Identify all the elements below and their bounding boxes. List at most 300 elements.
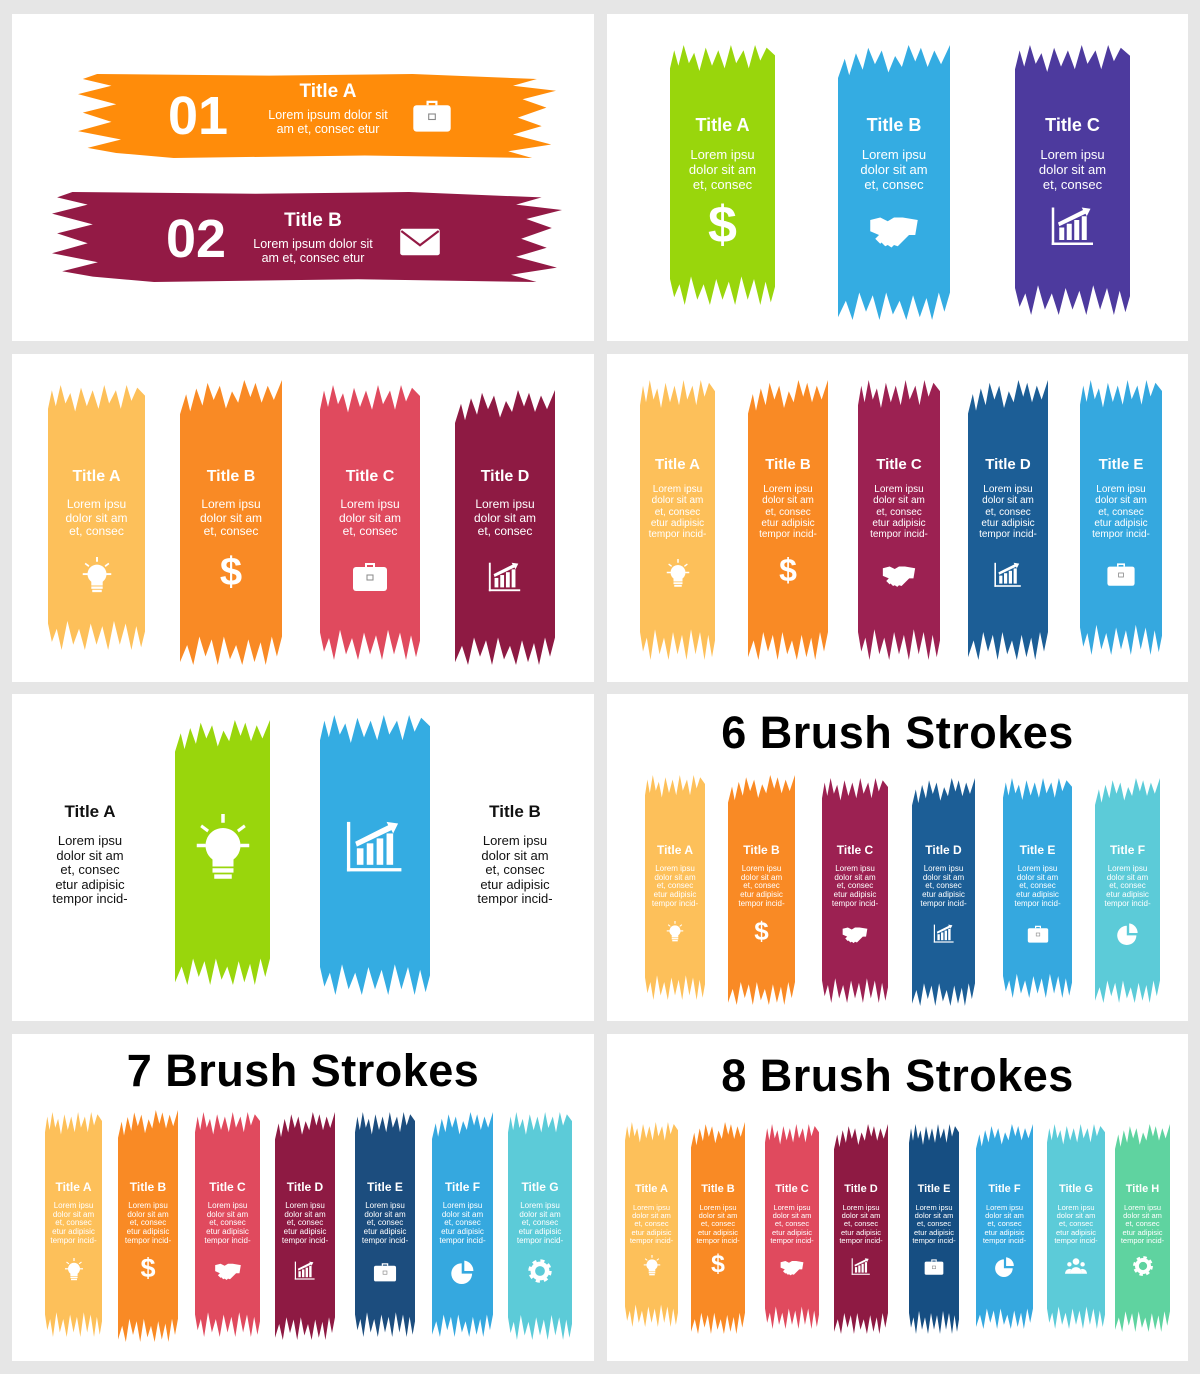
text: dolor sit am xyxy=(741,873,782,882)
text: et, consec xyxy=(634,1219,669,1228)
text: dolor sit am xyxy=(1039,162,1106,177)
text: etur adipisic xyxy=(981,518,1035,529)
icon: chart xyxy=(1052,208,1093,245)
title: Title F xyxy=(1110,843,1145,857)
text: Lorem ipsu xyxy=(842,1203,880,1212)
title: Title E xyxy=(1099,456,1143,473)
text: et, consec xyxy=(130,1218,166,1227)
brush 6-D xyxy=(912,778,975,1006)
text: tempor incid- xyxy=(630,1236,673,1245)
brush 8-G xyxy=(1047,1124,1105,1329)
text xyxy=(204,1202,250,1244)
text: dolor sit am xyxy=(200,510,262,524)
text: Lorem ipsu xyxy=(773,1203,811,1212)
brush: 4-B xyxy=(180,380,282,665)
text: dolor sit am xyxy=(689,162,756,177)
text: tempor incid- xyxy=(1014,899,1061,908)
brush: 5-C xyxy=(858,380,940,660)
text: et, consec xyxy=(444,1218,481,1227)
brush 8-C xyxy=(765,1124,819,1329)
text: et, consec xyxy=(876,507,922,518)
heading: 7 Brush Strokes: 7 Brush Strokes xyxy=(127,1045,479,1096)
text: Lorem ipsu xyxy=(1018,864,1057,873)
title: Title B xyxy=(743,843,780,857)
panel: 8 brush strokes xyxy=(607,1034,1188,1361)
title: Title A xyxy=(695,115,750,135)
text: Lorem ipsu xyxy=(201,497,261,511)
icon: briefcase xyxy=(353,563,387,591)
text: dolor sit am xyxy=(519,1210,561,1219)
title: Title A xyxy=(657,843,693,857)
text xyxy=(50,1202,96,1244)
icon: bulb xyxy=(196,814,250,879)
title: Title A xyxy=(635,1183,668,1195)
text xyxy=(1014,865,1060,908)
text: etur adipisic xyxy=(914,1228,954,1237)
text xyxy=(738,865,784,908)
text xyxy=(1092,484,1150,539)
text: tempor incid- xyxy=(912,1236,956,1245)
title: Title G xyxy=(1059,1183,1093,1195)
icon xyxy=(1132,1255,1154,1277)
text: etur adipisic xyxy=(441,1227,484,1236)
text: et, consec xyxy=(367,1218,403,1227)
panel: four strokes xyxy=(12,354,594,682)
icon xyxy=(528,1259,552,1283)
text xyxy=(1115,1204,1170,1245)
icon: envelope xyxy=(400,228,440,256)
text: tempor incid- xyxy=(1104,899,1151,908)
brush 8-A xyxy=(625,1122,678,1327)
text xyxy=(66,500,127,536)
text block: Title B xyxy=(477,802,553,906)
brush 7-B xyxy=(118,1110,178,1342)
brush 7-D xyxy=(275,1112,335,1340)
icon: $ xyxy=(754,916,769,946)
text: etur adipisic xyxy=(841,1228,881,1237)
text: et, consec xyxy=(985,507,1031,518)
text: et, consec xyxy=(743,881,780,890)
panel: 6 brush strokes xyxy=(607,694,1188,1021)
text: Lorem ipsu xyxy=(874,484,924,495)
brush: 5-A xyxy=(640,380,715,660)
brush: 01 orange xyxy=(78,74,556,158)
text: Lorem ipsu xyxy=(520,1201,560,1210)
text: et, consec xyxy=(1098,507,1144,518)
text: et, consec xyxy=(1125,1219,1160,1228)
text xyxy=(474,500,536,536)
text block: Title A: dolor sit am xyxy=(56,848,124,863)
text: tempor incid- xyxy=(839,1236,883,1245)
text: tempor incid- xyxy=(652,899,698,908)
icon: handshake xyxy=(882,566,916,587)
icon: briefcase xyxy=(413,100,451,132)
text xyxy=(648,484,706,539)
number 01: 01 xyxy=(168,86,228,146)
text block: Title B: et, consec xyxy=(485,862,545,877)
brush: 5-B xyxy=(748,380,828,660)
text: etur adipisic xyxy=(52,1227,95,1236)
text xyxy=(200,500,262,536)
text: tempor incid- xyxy=(759,529,817,540)
text xyxy=(362,1202,408,1244)
text: dolor sit am xyxy=(364,1210,406,1219)
text xyxy=(696,1204,740,1244)
brush: 4-C xyxy=(320,385,420,660)
icon xyxy=(994,1255,1016,1277)
text: Lorem ipsu xyxy=(655,864,695,873)
brush 6-C xyxy=(822,778,888,1003)
text: tempor incid- xyxy=(1121,1236,1164,1245)
text: tempor incid- xyxy=(282,1236,328,1245)
text block: Title B: Title B xyxy=(489,802,541,821)
brush: 4-A xyxy=(48,385,145,650)
text: tempor incid- xyxy=(696,1236,740,1245)
text: etur adipisic xyxy=(364,1227,406,1236)
title: Title A xyxy=(72,468,120,485)
text block: Title B: tempor incid- xyxy=(477,891,553,906)
text: tempor incid- xyxy=(920,899,967,908)
text xyxy=(689,150,756,191)
title: Title C xyxy=(837,843,873,857)
brush 7-A xyxy=(45,1112,102,1337)
text: dolor sit am xyxy=(654,873,696,882)
text: dolor sit am xyxy=(1095,495,1147,506)
text: tempor incid- xyxy=(770,1236,814,1245)
text: Lorem ipsu xyxy=(1040,147,1105,162)
text: tempor incid- xyxy=(204,1236,251,1245)
text: dolor sit am xyxy=(1017,873,1058,882)
text: dolor sit am xyxy=(652,495,703,506)
icon xyxy=(842,928,868,944)
title: Title A xyxy=(55,1180,92,1194)
brush 8-F xyxy=(976,1124,1033,1329)
brush: 3-B blue xyxy=(838,45,950,320)
title: Title F xyxy=(445,1180,480,1194)
text: dolor sit am xyxy=(762,495,814,506)
icon: chart xyxy=(488,562,520,592)
text: dolor sit am xyxy=(923,873,964,882)
text xyxy=(1047,1204,1105,1245)
text: tempor incid- xyxy=(517,1236,563,1245)
brush: 5-E xyxy=(1080,380,1162,655)
text block: Title A xyxy=(52,802,128,906)
text: etur adipisic xyxy=(654,890,696,899)
text: etur adipisic xyxy=(740,890,783,899)
icon xyxy=(374,1263,396,1282)
text xyxy=(765,1204,819,1245)
text: et, consec xyxy=(69,524,124,538)
text: etur adipisic xyxy=(872,518,926,529)
text: Lorem ipsu xyxy=(67,497,126,511)
text xyxy=(920,865,966,908)
text: dolor sit am xyxy=(339,510,401,524)
text: Lorem ipsu xyxy=(690,147,755,162)
brush 7-G xyxy=(508,1112,572,1340)
heading: 6 Brush Strokes: 6 Brush Strokes xyxy=(721,707,1074,758)
brush 8-B xyxy=(691,1122,745,1334)
brush: 3-C purple xyxy=(1015,45,1130,315)
panel: two strokes with side text xyxy=(12,694,594,1021)
icon xyxy=(215,1264,241,1280)
text A: Lorem ipsum dolor sit xyxy=(268,108,388,122)
title: Title B xyxy=(765,456,811,473)
text: dolor sit am xyxy=(1057,1211,1095,1220)
text xyxy=(517,1202,563,1244)
text xyxy=(630,1204,673,1244)
title: Title D xyxy=(985,456,1031,473)
icon: $ xyxy=(140,1253,156,1283)
text xyxy=(976,1204,1033,1245)
text: Lorem ipsu xyxy=(653,484,702,495)
brush: 5-D xyxy=(968,380,1048,660)
text xyxy=(1039,150,1106,191)
text block: Title A: Lorem ipsu xyxy=(58,833,122,848)
icon xyxy=(451,1260,474,1284)
text xyxy=(834,1204,888,1245)
text: dolor sit am xyxy=(915,1211,953,1220)
title: Title D xyxy=(925,843,962,857)
text: Lorem ipsu xyxy=(742,864,781,873)
text: et, consec xyxy=(701,1219,735,1228)
title A: Title A xyxy=(299,81,356,102)
icon xyxy=(644,1255,660,1276)
panel: 7 brush strokes xyxy=(12,1034,594,1361)
icon xyxy=(934,924,954,943)
text: et, consec xyxy=(765,507,811,518)
title: Title C xyxy=(876,456,922,473)
text: Lorem ipsu xyxy=(1057,1203,1095,1212)
text: et, consec xyxy=(209,1218,246,1227)
text: dolor sit am xyxy=(773,1211,811,1220)
text: et, consec xyxy=(917,1219,951,1228)
text: etur adipisic xyxy=(922,890,965,899)
title: Title D xyxy=(287,1180,323,1194)
icon xyxy=(666,921,684,942)
icon xyxy=(778,1255,806,1279)
text xyxy=(125,1202,171,1244)
title: Title H xyxy=(1126,1183,1159,1195)
text: Lorem ipsu xyxy=(983,484,1033,495)
text: tempor incid- xyxy=(979,529,1037,540)
text block: Title A: tempor incid- xyxy=(52,891,128,906)
icon: handshake xyxy=(870,218,918,248)
text: Lorem ipsu xyxy=(365,1201,405,1210)
text B: Lorem ipsum dolor sit xyxy=(253,237,373,251)
text block: Title A: Title A xyxy=(64,802,116,821)
text A: am et, consec etur xyxy=(277,122,379,136)
text: etur adipisic xyxy=(1106,890,1149,899)
text: dolor sit am xyxy=(860,162,928,177)
icon xyxy=(65,1258,83,1280)
text: etur adipisic xyxy=(834,890,876,899)
text: et, consec xyxy=(1043,177,1102,192)
text: et, consec xyxy=(522,1218,558,1227)
title: Title C xyxy=(1045,115,1100,135)
text: dolor sit am xyxy=(442,1210,483,1219)
text A xyxy=(269,110,388,135)
text: Lorem ipsu xyxy=(835,864,875,873)
text: et, consec xyxy=(775,1219,809,1228)
text: etur adipisic xyxy=(631,1228,672,1237)
text: etur adipisic xyxy=(519,1227,561,1236)
text: Lorem ipsu xyxy=(986,1203,1023,1212)
icon: dollar: $ xyxy=(220,550,242,594)
brush: blue with chart xyxy=(320,715,430,995)
text B: am et, consec etur xyxy=(262,251,364,265)
text: et, consec xyxy=(987,1219,1022,1228)
icon: bulb xyxy=(82,557,112,592)
heading: 8 Brush Strokes: 8 Brush Strokes xyxy=(721,1050,1074,1101)
text: etur adipisic xyxy=(772,1228,812,1237)
text: tempor incid- xyxy=(125,1236,171,1245)
icon: chart xyxy=(346,822,402,872)
text: Lorem ipsu xyxy=(340,497,400,511)
brush 7-C xyxy=(195,1112,260,1337)
text: etur adipisic xyxy=(206,1227,249,1236)
title: Title A xyxy=(655,456,700,473)
text: dolor sit am xyxy=(284,1210,326,1219)
title: Title C xyxy=(775,1183,809,1195)
text: et, consec xyxy=(844,1219,878,1228)
brush 8-E xyxy=(909,1124,959,1334)
icon: briefcase xyxy=(1107,563,1135,586)
text: Lorem ipsu xyxy=(924,864,963,873)
icon xyxy=(294,1262,315,1280)
text: Lorem ipsu xyxy=(699,1203,737,1212)
text: etur adipisic xyxy=(651,518,704,529)
icon: dollar: $ xyxy=(779,552,797,588)
text B xyxy=(254,238,373,264)
icon xyxy=(850,1255,872,1277)
brush 6-B xyxy=(728,775,795,1005)
text: et, consec xyxy=(693,177,752,192)
title: Title E xyxy=(367,1180,403,1194)
text: etur adipisic xyxy=(127,1227,169,1236)
title: Title C xyxy=(346,468,394,485)
title: Title D xyxy=(481,468,529,485)
text: et, consec xyxy=(1019,881,1056,890)
text xyxy=(440,1202,486,1244)
brush 6-A xyxy=(645,775,705,1000)
text: dolor sit am xyxy=(873,495,925,506)
text: dolor sit am xyxy=(207,1210,248,1219)
text xyxy=(282,1202,328,1244)
text: etur adipisic xyxy=(1094,518,1148,529)
text xyxy=(870,484,928,539)
title: Title B xyxy=(701,1183,735,1195)
brush: 02 purple xyxy=(52,192,562,282)
text: tempor incid- xyxy=(649,529,706,540)
brush 7-F xyxy=(432,1112,493,1337)
brush 6-F xyxy=(1095,778,1160,1003)
text xyxy=(1104,865,1150,908)
text: etur adipisic xyxy=(698,1228,738,1237)
brush 8-D xyxy=(834,1124,888,1334)
title: Title B xyxy=(867,115,921,135)
text block: Title B: dolor sit am xyxy=(481,848,549,863)
text: etur adipisic xyxy=(984,1228,1025,1237)
text: dolor sit am xyxy=(53,1210,94,1219)
title: Title B xyxy=(207,468,255,485)
icon xyxy=(1117,923,1138,945)
text: dolor sit am xyxy=(1107,873,1148,882)
icon: dollar: $ xyxy=(708,196,737,254)
text xyxy=(340,500,400,536)
brush: 3-A green xyxy=(670,45,775,305)
title: Title B xyxy=(130,1180,166,1194)
text: tempor incid- xyxy=(870,529,928,540)
number 02: 02 xyxy=(166,209,226,269)
panel: three strokes xyxy=(607,14,1188,341)
brush: green with bulb xyxy=(175,720,270,985)
text: Lorem ipsu xyxy=(1108,864,1147,873)
title: Title C xyxy=(209,1180,246,1194)
icon xyxy=(923,1255,945,1277)
brush: 4-D xyxy=(455,390,555,665)
text: dolor sit am xyxy=(65,510,128,524)
text: et, consec xyxy=(1059,1219,1093,1228)
icon xyxy=(1063,1255,1089,1277)
text: etur adipisic xyxy=(1016,890,1059,899)
text: et, consec xyxy=(655,507,700,518)
text: tempor incid- xyxy=(439,1236,486,1245)
text: dolor sit am xyxy=(632,1211,671,1220)
brush 6-E xyxy=(1003,778,1072,998)
text: dolor sit am xyxy=(699,1211,737,1220)
icon: chart xyxy=(994,562,1021,587)
text xyxy=(652,865,698,908)
text: dolor sit am xyxy=(127,1210,169,1219)
text: Lorem ipsu xyxy=(128,1201,168,1210)
text: Lorem ipsu xyxy=(1096,484,1146,495)
text: et, consec xyxy=(657,881,693,890)
text: etur adipisic xyxy=(284,1227,326,1236)
text block: Title A: etur adipisic xyxy=(55,877,125,892)
text: dolor sit am xyxy=(842,1211,880,1220)
panel: five strokes xyxy=(607,354,1188,682)
icon: bulb xyxy=(666,559,690,587)
text: Lorem ipsu xyxy=(54,1201,93,1210)
text: Lorem ipsu xyxy=(1124,1203,1161,1212)
text: et, consec xyxy=(864,177,924,192)
text xyxy=(860,150,927,191)
text: dolor sit am xyxy=(985,1211,1024,1220)
brush 8-H xyxy=(1115,1124,1170,1332)
text: et, consec xyxy=(55,1218,92,1227)
text block: Title B: Lorem ipsu xyxy=(483,833,547,848)
text: etur adipisic xyxy=(1122,1228,1163,1237)
text: Lorem ipsu xyxy=(208,1201,247,1210)
text: et, consec xyxy=(287,1218,323,1227)
title: Title E xyxy=(918,1183,950,1195)
title: Title E xyxy=(1020,843,1055,857)
text: etur adipisic xyxy=(761,518,815,529)
text: etur adipisic xyxy=(1056,1228,1096,1237)
icon: $ xyxy=(711,1250,725,1278)
text: et, consec xyxy=(837,881,873,890)
text: dolor sit am xyxy=(982,495,1034,506)
text block: Title A: et, consec xyxy=(60,862,120,877)
text block: Title B: etur adipisic xyxy=(480,877,550,892)
text: Lorem ipsu xyxy=(285,1201,325,1210)
text: et, consec xyxy=(925,881,962,890)
text: Lorem ipsu xyxy=(915,1203,953,1212)
title: Title G xyxy=(521,1180,559,1194)
text xyxy=(979,484,1036,539)
brush 7-E xyxy=(355,1112,415,1337)
title: Title F xyxy=(988,1183,1021,1195)
